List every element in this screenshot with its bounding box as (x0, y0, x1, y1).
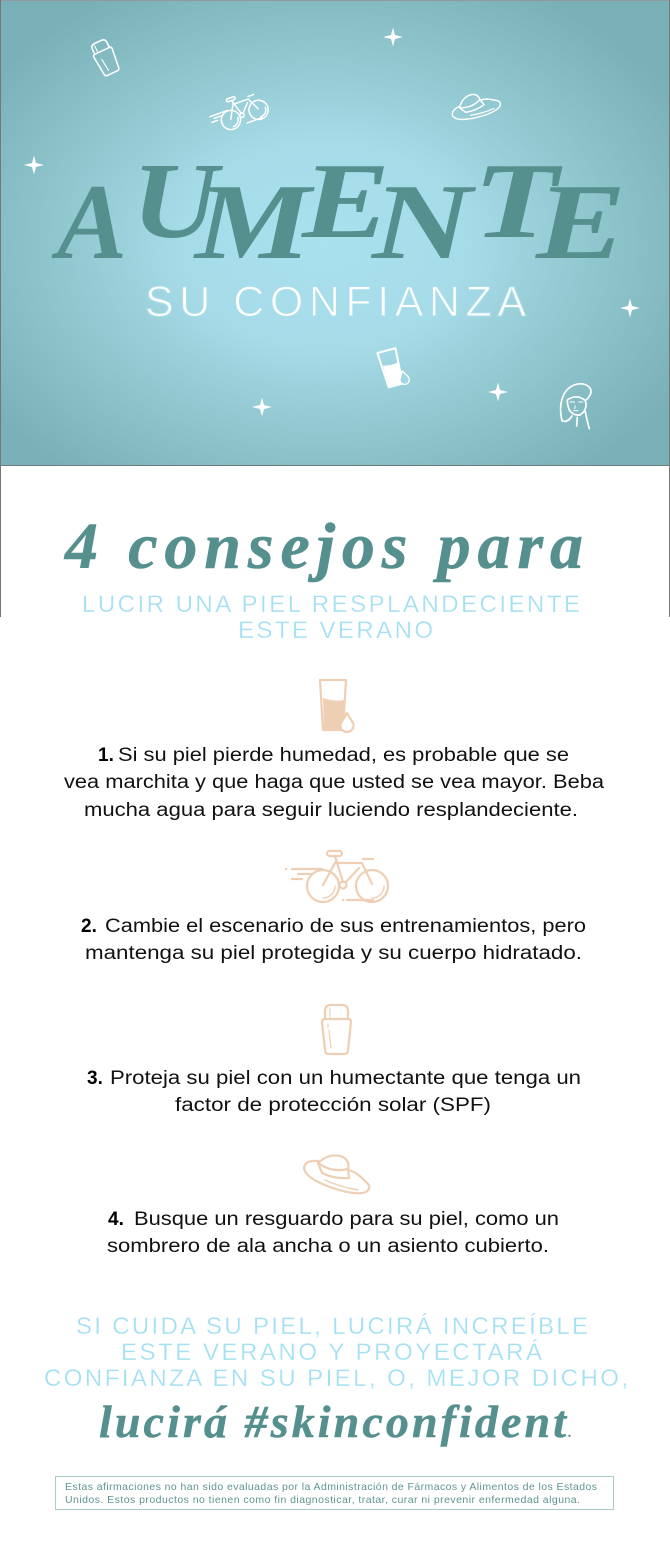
tip 3 text: factor de protección solar (SPF) (175, 1095, 491, 1116)
icon: sparkle (252, 398, 272, 416)
tip 1 text: Si su piel pierde humedad, es probable que se (118, 745, 569, 766)
hashtag line: lucirá #skinconfident (99, 1396, 567, 1447)
hashtag line: . (567, 1420, 572, 1442)
tip 2 text (81, 916, 586, 964)
panel: hero banner (0, 0, 670, 466)
title: AUMENTE: N (371, 163, 477, 282)
tip 3 text (87, 1068, 581, 1116)
heading: 4 consejos para: 4 consejos para (63, 510, 583, 583)
tip 1 text (64, 745, 604, 821)
icon: sparkle (488, 382, 508, 402)
disclaimer box: Estas afirmaciones no han sido evaluadas por la Administración de Fármacos y Alimentos de los Estados (65, 1481, 597, 1493)
icon: water glass (320, 680, 354, 732)
disclaimer box (56, 1476, 614, 1510)
tip 3 text: Proteja su piel con un humectante que tenga un (110, 1068, 581, 1089)
subtitle: SU CONFIANZA: SU CONFIANZA (145, 278, 526, 326)
icon: wide-brim hat (304, 1155, 369, 1193)
title: AUMENTE: E (301, 142, 390, 261)
tip 1 text: mucha agua para seguir luciendo resplandeciente. (84, 800, 578, 821)
title: AUMENTE: T (473, 142, 563, 261)
tip 2 text: 2. (81, 916, 97, 937)
tip 1 text: vea marchita y que haga que usted se vea mayor. Beba (64, 772, 604, 793)
icon: white hat (448, 83, 502, 132)
title: AUMENTE: U (132, 142, 224, 261)
subheading: lucir una piel resplandeciente: LUCIR UNA PIEL RESPLANDECIENTE (82, 591, 580, 618)
tip 4 text (107, 1209, 559, 1257)
icon: white bottle (89, 38, 122, 77)
tip 4 text: Busque un resguardo para su piel, como un (134, 1209, 559, 1230)
icon: white woman's face (561, 384, 591, 429)
icon: bicycle (286, 851, 388, 902)
icon: sparkle (620, 298, 640, 318)
tip 4 text: sombrero de ala ancha o un asiento cubierto. (107, 1236, 549, 1257)
icon: sparkle (24, 156, 44, 174)
closing statement: SI CUIDA SU PIEL, LUCIRÁ INCREÍBLE (76, 1313, 588, 1340)
closing statement (44, 1313, 628, 1392)
subheading: lucir una piel resplandeciente: ESTE VERANO (238, 617, 433, 644)
title: AUMENTE: M (193, 163, 316, 282)
tip 3 text: 3. (87, 1068, 103, 1089)
icon: white water glass (377, 347, 410, 389)
tip 2 text: mantenga su piel protegida y su cuerpo hidratado. (85, 943, 582, 964)
icon: sparkle (383, 28, 403, 46)
title: AUMENTE (51, 142, 626, 282)
title: AUMENTE: E (535, 163, 626, 282)
icon: bottle (322, 1005, 351, 1054)
disclaimer box: Unidos. Estos productos no tienen como fin diagnosticar, tratar, curar ni prevenir enfermedad alguna. (65, 1494, 580, 1506)
tip 2 text: Cambie el escenario de sus entrenamientos, pero (105, 916, 586, 937)
icon: white bicycle (206, 87, 271, 135)
page edge lines (0, 0, 670, 617)
title: AUMENTE: A (51, 163, 127, 282)
closing statement: CONFIANZA EN SU PIEL, O, MEJOR DICHO, (44, 1365, 628, 1392)
subheading: lucir una piel resplandeciente (82, 591, 580, 644)
closing statement: ESTE VERANO Y PROYECTARÁ (121, 1339, 542, 1366)
tip 1 text: 1. (98, 745, 114, 766)
tip 4 text: 4. (108, 1209, 124, 1230)
